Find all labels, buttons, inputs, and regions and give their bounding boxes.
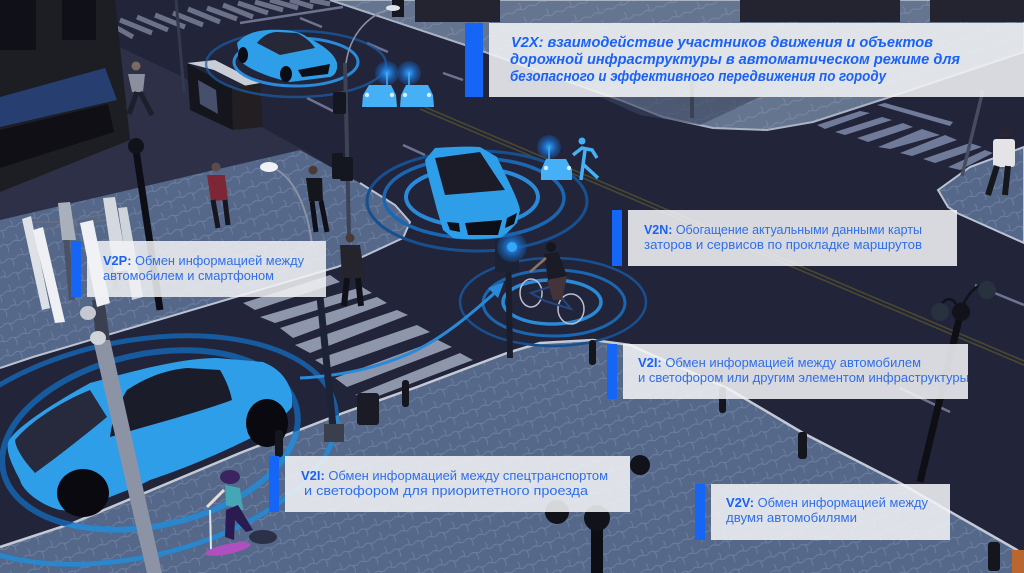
- orange object at corner: [1012, 550, 1024, 573]
- arrow: signal to traffic light: [300, 282, 504, 378]
- car: centre: [425, 147, 520, 239]
- traffic light beacon: [497, 232, 527, 262]
- sidewalk: bottom: [0, 340, 1024, 573]
- building: top left: [0, 0, 130, 192]
- car: top: [237, 30, 337, 82]
- icon: two connected cars: [362, 61, 434, 107]
- road centre line: [420, 105, 1024, 365]
- person: man in suit: [340, 234, 365, 306]
- callout: V2N: заторов и сервисов по прокладке маршрутов: [644, 237, 922, 252]
- buildings behind top edge: [392, 0, 1024, 125]
- signal rings: bottom car: [0, 301, 358, 573]
- road markings: [240, 7, 1024, 412]
- litter bin: [357, 393, 379, 425]
- callout: V2N: V2N: Обогащение актуальными данными карты: [644, 222, 922, 237]
- kerb: bottom: [0, 340, 1024, 556]
- kerb bollards: [275, 340, 1000, 571]
- sidewalk: left corner: [0, 150, 410, 368]
- callout: V2V: [695, 484, 950, 540]
- callout: V2I traffic light: V2I: Обмен информацией между автомобилем: [638, 355, 921, 370]
- callout: V2X: V2X: взаимодействие участников движения и объектов: [511, 34, 933, 51]
- sidewalk: top right: [330, 0, 1024, 130]
- callout: V2V: двумя автомобилями: [726, 510, 857, 525]
- kerb: left corner: [0, 183, 410, 368]
- pole base: [324, 424, 344, 442]
- crosswalk: top left: [117, 0, 330, 37]
- sidewalk: right corner: [938, 147, 1024, 243]
- signal rings on pavement: [0, 414, 340, 567]
- callout: V2N: [612, 210, 957, 266]
- callout: V2V: V2V: Обмен информацией между: [726, 495, 928, 510]
- child on scooter: [204, 470, 277, 559]
- callout: V2I traffic light: [607, 344, 969, 399]
- person: woman in black: [306, 166, 327, 232]
- callout: V2P: автомобилем и смартфоном: [103, 268, 274, 283]
- sidewalk: top left, in shade: [0, 0, 330, 220]
- person: far left: [128, 62, 152, 115]
- car: bottom: [8, 358, 292, 517]
- callout: V2I priority: и светофором для приоритетного проезда: [304, 483, 589, 498]
- person: white shirt: [988, 128, 1015, 195]
- pedestrians: [128, 62, 1015, 306]
- person: red jacket: [207, 162, 228, 228]
- lamp heads: [128, 5, 996, 531]
- crosswalk: centre: [243, 275, 473, 398]
- callout: V2X: безопасного и эффективного передвижения по городу: [510, 68, 887, 85]
- cell tower: [22, 197, 162, 573]
- callout: V2X: [465, 23, 1024, 97]
- callout: V2I priority: [269, 456, 630, 512]
- signal rings: top car: [206, 31, 386, 97]
- bus stop: [187, 60, 263, 130]
- callout: V2P: [71, 241, 326, 297]
- crosswalk: right: [817, 103, 993, 170]
- callout: V2X: дорожной инфраструктуры в автоматическом режиме для: [510, 51, 960, 68]
- callout: V2I traffic light: и светофором или другим элементом инфраструктуры: [638, 370, 969, 385]
- callout: V2P: V2P: Обмен информацией между: [103, 253, 304, 268]
- signal rings: cyclist: [460, 258, 646, 346]
- callout: V2I priority: V2I: Обмен информацией между спецтранспортом: [301, 468, 608, 483]
- icon: car and pedestrian: [537, 135, 598, 180]
- cyclist: [520, 242, 584, 324]
- signal rings: centre car: [367, 151, 587, 251]
- traffic lights: [332, 92, 519, 272]
